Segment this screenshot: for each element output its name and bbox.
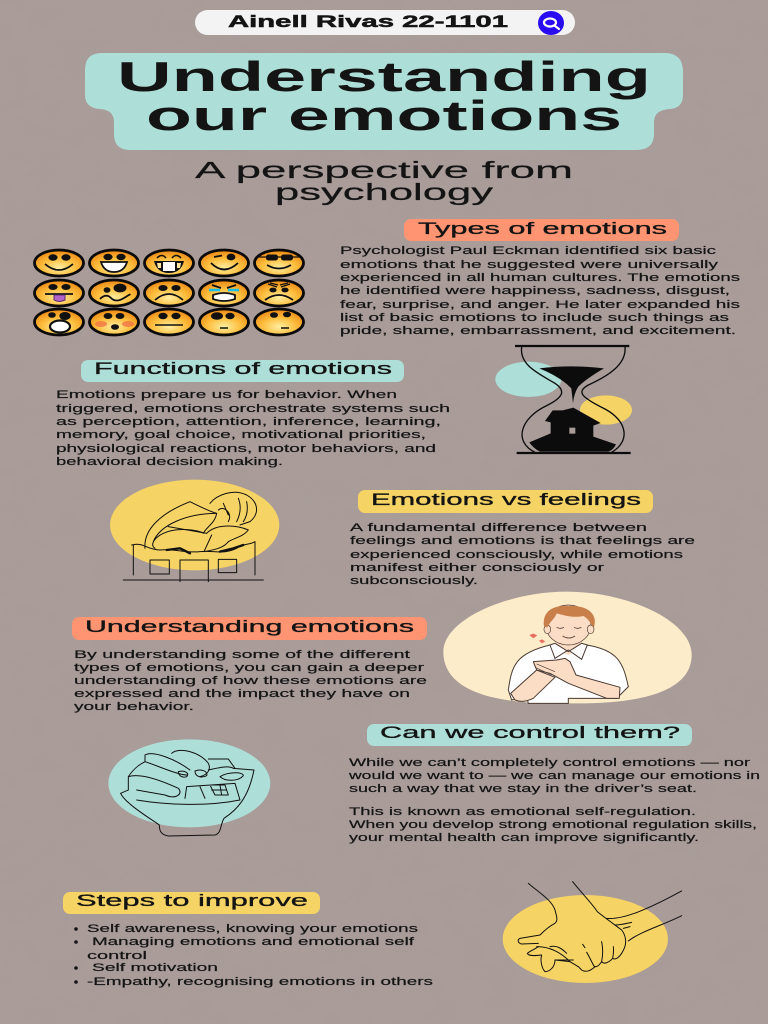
heading: emotions vs feelings [358,490,653,513]
title: our emotions [146,92,622,139]
text: emotions vs feelings: experienced consciously, while emotions [350,549,684,561]
text: can we control them: When you develop strong emotional regulation skills, [349,819,757,831]
emoji: crying [200,280,248,306]
text: can we control them: such a way that we stay in the driver’s seat. [349,783,697,795]
heading: can we control them: Can we control them? [380,724,680,742]
illustration: clasped hands [503,882,682,983]
text: understanding emotions: expressed and the impact they have on [74,688,410,700]
emoji: angry [254,280,304,306]
title: Understanding [117,53,651,100]
text: understanding emotions: your behavior. [74,701,194,713]
text: types of emotions: pride, shame, embarrassment, and excitement. [340,325,736,337]
emoji: blank stare [254,309,304,335]
list: steps to improve: Self motivation [92,962,218,974]
illustration: hourglass with house [495,346,632,453]
emoji: blushing [90,309,138,335]
text: functions of emotions: triggered, emotions orchestrate systems such [56,403,450,415]
text: types of emotions: emotions that he suggested were universally [340,259,719,271]
heading: functions of emotions: Functions of emotions [94,360,392,378]
text: functions of emotions: behavioral decision making. [56,456,283,468]
emoji: unimpressed [200,309,248,335]
text: types of emotions: Psychologist Paul Eckman identified six basic [340,245,717,257]
heading: steps to improve [63,892,320,914]
text: understanding emotions: By understanding some of the different [74,649,411,661]
text: understanding emotions: types of emotions, you can gain a deeper [74,662,424,674]
emoji: wink [200,250,248,276]
illustration: smiling man with hands on chest [443,592,692,703]
text: functions of emotions: physiological reactions, motor behaviors, and [56,443,436,455]
list: steps to improve: control [87,950,147,962]
text: can we control them [347,757,760,844]
text: types of emotions [340,245,741,337]
list: steps to improve: Managing emotions and emotional self [92,936,415,948]
icon grid: emoji faces [34,250,304,335]
emoji: tongue [34,280,84,306]
heading: functions of emotions [81,360,404,382]
text: emotions vs feelings: A fundamental difference between [350,522,647,534]
text: can we control them: your mental health can improve significantly. [349,832,699,844]
author name: Ainell Rivas 22-1101 [228,12,508,31]
subtitle: psychology [275,179,494,205]
emoji: smile [34,250,84,276]
title [117,53,651,139]
text: types of emotions: experienced in all human cultures. The emotions [340,272,741,284]
heading: understanding emotions [72,617,427,640]
illustration: figure curled on a building [110,480,279,582]
text: emotions vs feelings: feelings and emotions is that feelings are [350,535,695,547]
text: types of emotions: fear, surprise, and anger. He later expanded his [340,299,741,311]
text: functions of emotions: memory, goal choice, motivational priorities, [56,429,426,441]
text: understanding emotions [74,649,427,713]
heading: types of emotions [404,219,679,241]
text: functions of emotions [56,389,450,468]
emoji: grin [90,250,138,276]
list: steps to improve: Self awareness, knowing your emotions [87,923,419,935]
heading: understanding emotions: Understanding emotions [85,618,414,636]
text: can we control them: would we want to — we can manage our emotions in [347,770,760,782]
emoji: neutral [144,309,194,335]
text: can we control them: This is known as emotional self-regulation. [349,806,696,818]
text: functions of emotions: Emotions prepare us for behavior. When [56,389,397,401]
emoji: sunglasses [254,250,304,276]
text: functions of emotions: as perception, attention, inference, learning, [56,416,441,428]
emoji: confused [90,280,138,306]
icon: magnifier [538,11,564,35]
text: types of emotions: he identified were happiness, sadness, disgust, [340,285,730,297]
emoji: buck teeth [144,250,194,276]
emoji: shocked [34,309,84,335]
illustration: hands holding a phone [108,739,270,836]
list: steps to improve: -Empathy, recognising emotions in others [87,976,434,988]
text: emotions vs feelings: manifest either consciously or [350,562,604,574]
text: can we control them: While we can’t completely control emotions — nor [349,757,750,769]
heading: types of emotions: Types of emotions [418,220,667,238]
text: understanding emotions: understanding of how these emotions are [74,675,427,687]
search bar with author name [195,10,575,35]
text: emotions vs feelings: subconsciously. [350,575,478,587]
text: types of emotions: list of basic emotions to include such things as [340,312,730,324]
heading: steps to improve: Steps to improve [76,892,308,910]
title panel [85,53,683,150]
subtitle [195,157,573,205]
emoji: sad [144,280,194,306]
heading: can we control them [367,724,692,746]
text: emotions vs feelings [350,522,695,587]
heading: emotions vs feelings: Emotions vs feelings [371,491,641,509]
subtitle: A perspective from [195,157,573,183]
list: steps to improve [74,923,434,988]
